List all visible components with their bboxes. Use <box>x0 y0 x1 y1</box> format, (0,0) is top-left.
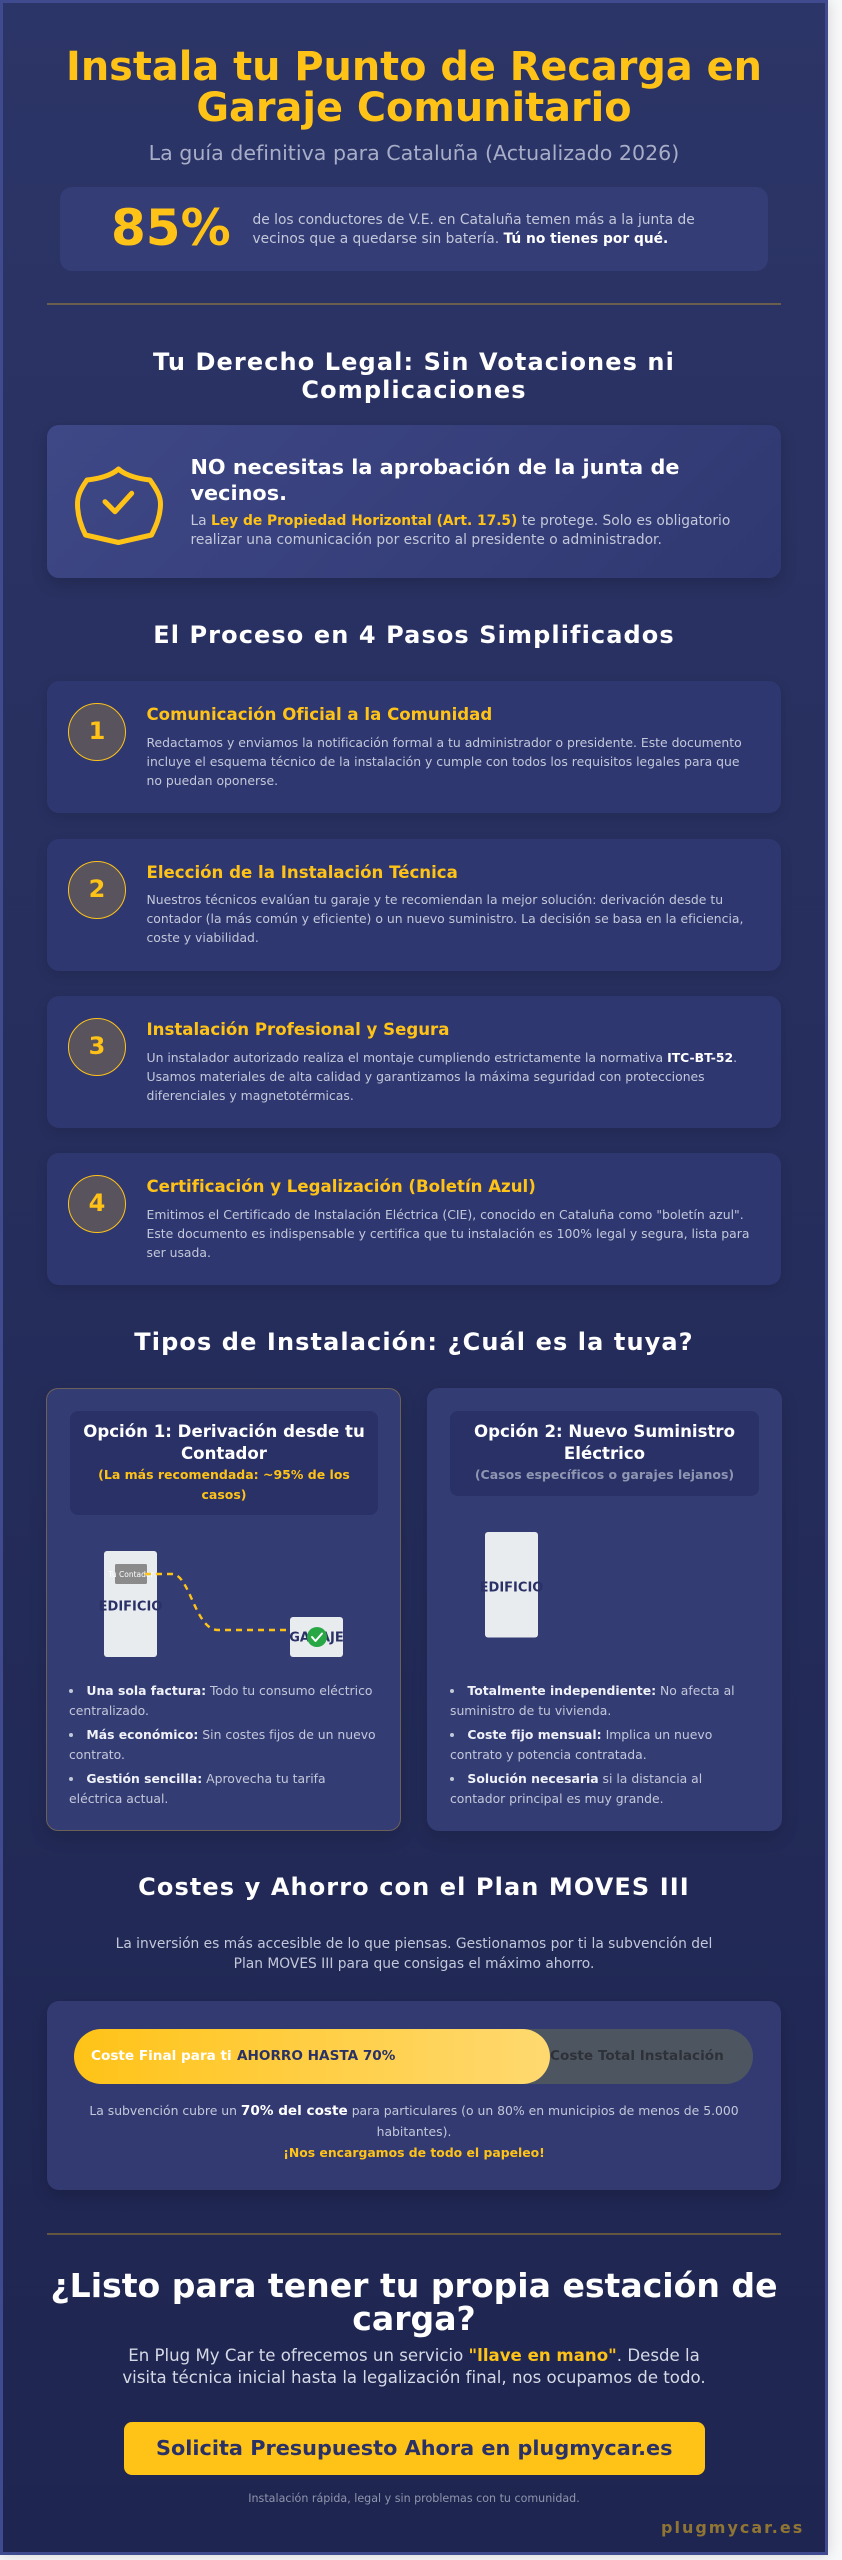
legal description: realizar una comunicación por escrito al presidente o administrador. <box>190 532 662 548</box>
call to action heading: ¿Listo para tener tu propia estación de <box>50 2266 778 2304</box>
panel: step 3 <box>47 996 781 1128</box>
panel: option 2 <box>427 1388 782 1831</box>
option 1 title: Contador <box>181 1444 267 1463</box>
label: savings: AHORRO HASTA 70% <box>237 2048 395 2064</box>
option 2 title <box>474 1422 735 1463</box>
option 2 benefits: Solución necesaria si la distancia al <box>467 1771 702 1786</box>
small print: Instalación rápida, legal y sin problemas con tu comunidad. <box>248 2492 580 2505</box>
step number 4: 4 <box>89 1189 105 1217</box>
stat description: de los conductores de V.E. en Cataluña temen más a la junta de <box>252 212 695 228</box>
legal heading: NO necesitas la aprobación de la junta de <box>190 455 679 479</box>
step 1 text: Redactamos y enviamos la notificación formal a tu administrador o presidente. Este documento <box>146 734 742 750</box>
costs intro text: Plan MOVES III para que consigas el máximo ahorro. <box>234 1956 594 1972</box>
heading: legal right <box>153 348 675 404</box>
step 2 text: Nuestros técnicos evalúan tu garaje y te recomiendan la mejor solución: derivación desde tu <box>146 892 723 907</box>
option 1 recommendation <box>98 1467 350 1502</box>
legal description <box>190 512 730 548</box>
building: EDIFICIO <box>99 1600 162 1615</box>
panel: legal card <box>47 425 781 578</box>
costs intro text <box>116 1936 712 1972</box>
legal heading <box>190 455 679 505</box>
title: Instala tu Punto de Recarga en <box>66 44 762 90</box>
paperwork note: ¡Nos encargamos de todo el papeleo! <box>283 2144 545 2160</box>
step 2 text: contador (la más común y eficiente) o un nuevo suministro. La decisión se basa en la eficiencia, <box>146 911 743 926</box>
garage <box>289 1617 344 1657</box>
option 1 benefits: Gestión sencilla: Aprovecha tu tarifa <box>86 1771 326 1786</box>
option 2 benefits: contador principal es muy grande. <box>450 1791 664 1806</box>
label: final cost: Coste Final para ti <box>91 2048 232 2064</box>
stat number 85%: 85% <box>111 199 231 257</box>
step 4 text <box>146 1206 749 1260</box>
step 3 text <box>146 1050 737 1103</box>
subtitle: La guía definitiva para Cataluña (Actualizado 2026) <box>149 141 679 165</box>
call to action text: En Plug My Car te ofrecemos un servicio "llave en mano". Desde la <box>128 2346 700 2365</box>
step 3 text: Un instalador autorizado realiza el montaje cumpliendo estrictamente la normativa ITC-BT-52. <box>146 1050 737 1064</box>
option 1 recommendation: casos) <box>201 1487 247 1502</box>
dashed cable <box>145 1574 290 1630</box>
option 2 benefits: suministro de tu vivienda. <box>450 1703 611 1718</box>
meter: Tu Contador <box>107 1570 154 1579</box>
heading: installation types: Tipos de Instalación: ¿Cuál es la tuya? <box>134 1328 694 1356</box>
panel: savings <box>47 2001 781 2190</box>
call to action button <box>124 2422 705 2475</box>
title: Garaje Comunitario <box>196 85 632 131</box>
watermark: plugmycar.es <box>661 2518 804 2537</box>
step 1 text: incluye el esquema técnico de la instalación y cumple con todos los requisitos legales para que <box>146 754 740 769</box>
legal heading: vecinos. <box>190 481 287 505</box>
title <box>66 44 762 131</box>
step 3 text: diferenciales y magnetotérmicas. <box>146 1088 354 1103</box>
option 1 benefits: contrato. <box>69 1747 125 1762</box>
garage: GARAJE <box>289 1631 344 1646</box>
panel: step 1 <box>47 681 781 813</box>
option 1 benefits: Más económico: Sin costes fijos de un nuevo <box>86 1727 376 1742</box>
option 2 note: (Casos específicos o garajes lejanos) <box>475 1467 734 1482</box>
label: total cost: Coste Total Instalación <box>550 2048 724 2064</box>
call to action button: Solicita Presupuesto Ahora en plugmycar.es <box>156 2436 672 2460</box>
step number 1 <box>68 703 126 761</box>
option 1 title <box>83 1422 365 1463</box>
step 4 title: Certificación y Legalización (Boletín Azul) <box>146 1177 536 1196</box>
diagram: independent building: EDIFICIO <box>480 1581 543 1596</box>
option 1 recommendation: (La más recomendada: ~95% de los <box>98 1467 350 1482</box>
option 1 header <box>70 1411 378 1515</box>
diagram: branch from meter to garage <box>99 1551 344 1657</box>
savings bar <box>74 2029 753 2084</box>
panel: step 2 <box>47 838 781 970</box>
step number 3 <box>68 1018 126 1076</box>
step 2 text: coste y viabilidad. <box>146 930 259 945</box>
stat description <box>252 212 695 247</box>
heading: legal right: Tu Derecho Legal: Sin Votaciones ni <box>153 348 675 376</box>
panel: key statistic <box>60 187 768 271</box>
step number 4 <box>68 1175 126 1233</box>
option 1 benefits: Una sola factura: Todo tu consumo eléctrico <box>86 1683 372 1698</box>
option 2 header <box>450 1411 759 1496</box>
step 2 title: Elección de la Instalación Técnica <box>146 862 458 882</box>
option 1 benefits: eléctrica actual. <box>69 1791 168 1806</box>
stat description: vecinos que a quedarse sin batería. Tú no tienes por qué. <box>252 231 668 247</box>
step number 1: 1 <box>89 717 105 745</box>
step 4 text: Emitimos el Certificado de Instalación Eléctrica (CIE), conocido en Cataluña como "boletín azul". <box>146 1206 744 1222</box>
step 1 text: no puedan oponerse. <box>146 773 278 788</box>
option 2 benefits: Coste fijo mensual: Implica un nuevo <box>467 1727 712 1742</box>
step 1 title: Comunicación Oficial a la Comunidad <box>146 705 492 724</box>
subsidy note <box>89 2103 739 2139</box>
subsidy note: habitantes). <box>377 2124 451 2139</box>
diagram: independent building <box>480 1532 543 1638</box>
option 2 title: Opción 2: Nuevo Suministro <box>474 1422 735 1441</box>
option 1 benefits <box>69 1683 376 1806</box>
call to action text <box>122 2346 706 2387</box>
option 2 benefits: contrato y potencia contratada. <box>450 1747 647 1762</box>
costs intro text: La inversión es más accesible de lo que piensas. Gestionamos por ti la subvención del <box>116 1936 712 1952</box>
step number 2 <box>68 860 126 918</box>
call to action heading: carga? <box>352 2298 476 2338</box>
option 1 title: Opción 1: Derivación desde tu <box>83 1422 365 1441</box>
option 2 title: Eléctrico <box>564 1444 645 1463</box>
icon: green check <box>307 1627 327 1647</box>
step 4 text: Este documento es indispensable y certifica que tu instalación es 100% legal y segura, lista para <box>146 1226 749 1241</box>
panel: step 4 <box>47 1153 781 1285</box>
subsidy note: La subvención cubre un 70% del coste para particulares (o un 80% en municipios de menos de 5.000 <box>89 2103 739 2119</box>
option 2 benefits: Totalmente independiente: No afecta al <box>467 1683 735 1698</box>
option 1 benefits: centralizado. <box>69 1703 149 1718</box>
heading: legal right: Complicaciones <box>301 376 527 404</box>
building <box>99 1551 162 1657</box>
call to action text: visita técnica inicial hasta la legalización final, nos ocupamos de todo. <box>122 2368 706 2387</box>
panel: option 1 <box>46 1388 401 1831</box>
step 1 text <box>146 734 742 788</box>
heading: process: El Proceso en 4 Pasos Simplificados <box>153 621 675 649</box>
legal description: La Ley de Propiedad Horizontal (Art. 17.5) te protege. Solo es obligatorio <box>190 512 730 528</box>
step number 2: 2 <box>89 874 105 902</box>
heading: costs: Costes y Ahorro con el Plan MOVES III <box>138 1873 690 1901</box>
step 3 text: Usamos materiales de alta calidad y garantizamos la máxima seguridad con protecciones <box>146 1069 705 1084</box>
option 2 benefits <box>450 1683 735 1806</box>
step 4 text: ser usada. <box>146 1245 211 1260</box>
bar fill 70% <box>74 2029 550 2084</box>
meter <box>107 1564 154 1584</box>
call to action heading <box>50 2266 778 2338</box>
icon: shield with check <box>75 466 163 545</box>
step 3 title: Instalación Profesional y Segura <box>146 1020 449 1039</box>
step 2 text <box>146 892 743 945</box>
step number 3: 3 <box>89 1032 105 1060</box>
